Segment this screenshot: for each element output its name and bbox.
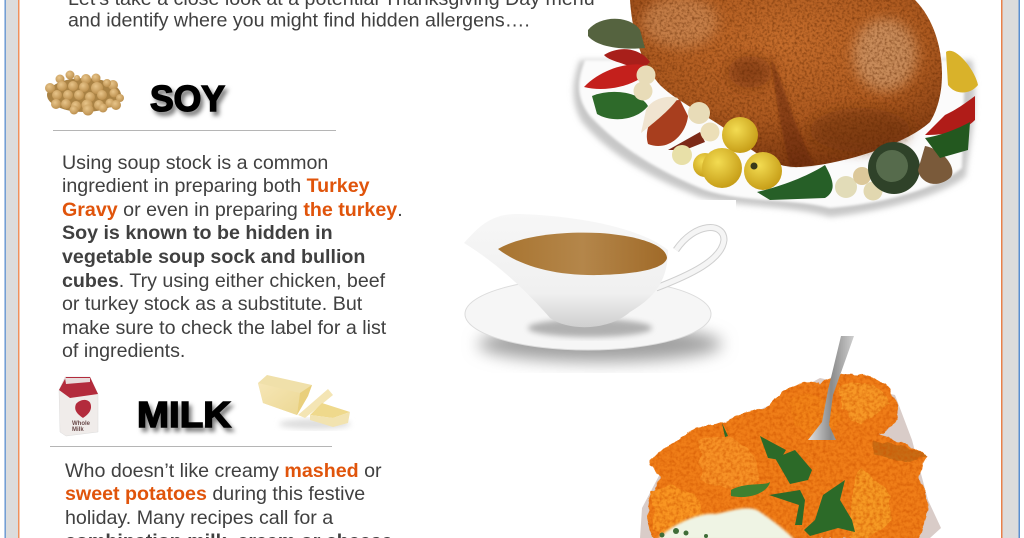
soy paragraph: Gravy or even in preparing the turkey. — [62, 199, 403, 221]
intro text — [68, 0, 595, 32]
intro text: and identify where you might find hidden allergens…. — [68, 10, 530, 32]
image: roast turkey on platter — [573, 0, 978, 217]
milk paragraph: Who doesn’t like creamy mashed or — [65, 460, 382, 482]
soy paragraph: cubes. Try using either chicken, beef — [62, 270, 386, 292]
fork — [808, 336, 854, 440]
divider — [53, 130, 336, 131]
gravy boat handle — [656, 228, 724, 288]
icon: milk carton: Whole — [72, 421, 91, 427]
soy paragraph — [62, 152, 403, 362]
soy paragraph: make sure to check the label for a list — [62, 317, 387, 339]
divider — [50, 446, 332, 447]
soy paragraph: Using soup stock is a common — [62, 152, 328, 174]
milk paragraph: holiday. Many recipes call for a — [65, 507, 333, 529]
heading: MILK: MILK — [137, 394, 231, 435]
milk paragraph — [65, 460, 393, 538]
image: mashed sweet potatoes with fork — [640, 336, 941, 538]
soy paragraph: or turkey stock as a substitute. But — [62, 293, 363, 315]
heading: SOY: SOY — [150, 78, 225, 119]
milk paragraph: sweet potatoes during this festive — [65, 483, 365, 505]
soy paragraph: vegetable soup sock and bullion — [62, 246, 365, 268]
topping — [657, 508, 795, 538]
turkey body — [630, 0, 942, 167]
icon: soybeans — [45, 70, 124, 116]
soy paragraph: of ingredients. — [62, 340, 185, 362]
image: gravy boat on saucer — [452, 214, 736, 368]
herb leaves — [722, 423, 855, 536]
icon: butter — [258, 375, 351, 429]
soy paragraph: Soy is known to be hidden in — [62, 222, 333, 244]
icon: milk carton — [59, 377, 98, 436]
icon: milk carton: Milk — [72, 427, 84, 433]
soy paragraph: ingredient in preparing both Turkey — [62, 175, 370, 197]
